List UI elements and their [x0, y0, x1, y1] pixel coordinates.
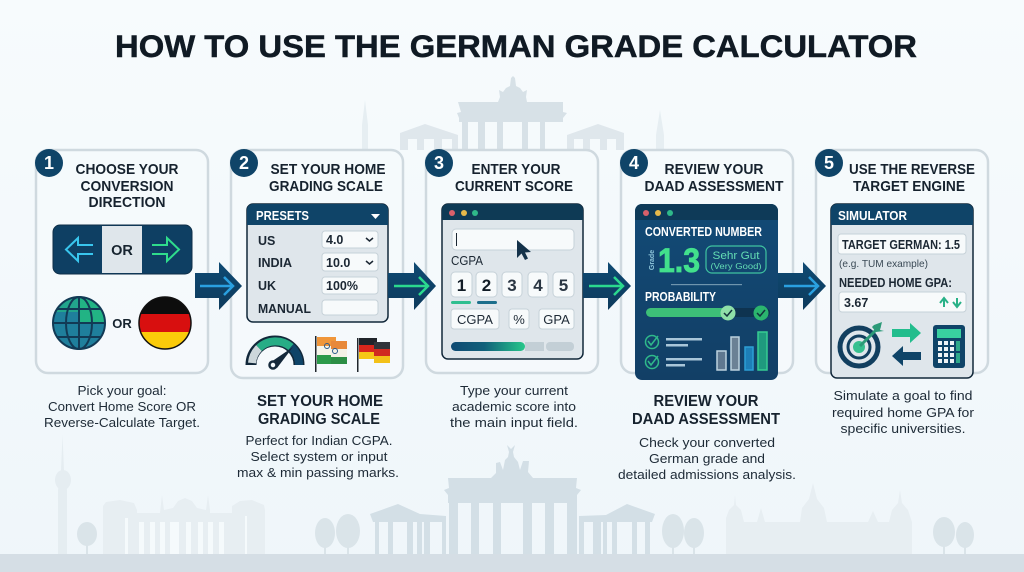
- Berlin TV tower: [55, 435, 71, 554]
- panel: step 1 choose direction: [35, 149, 208, 373]
- title: HOW TO USE THE GERMAN GRADE CALCULATOR: [115, 28, 917, 64]
- assessment dashboard window: [635, 204, 778, 380]
- step 4 lower heading: DAAD ASSESSMENT: [632, 411, 780, 428]
- palace silhouette: [726, 483, 912, 554]
- presets window: 4.0: [326, 233, 343, 247]
- step 5 heading: USE THE REVERSE: [849, 161, 975, 178]
- step 2 heading: SET YOUR HOME: [270, 161, 386, 178]
- score entry window: GPA: [543, 312, 570, 327]
- arrow: step 4 to 5: [778, 262, 826, 310]
- panel: step 3 current score: [425, 149, 598, 373]
- icon: germany flags: [357, 338, 390, 372]
- step 1 badge: 1: [44, 153, 54, 173]
- step 3 heading: ENTER YOUR: [472, 161, 561, 178]
- simulator window: SIMULATOR: [838, 209, 907, 223]
- presets window: PRESETS: [256, 209, 309, 223]
- step 2 badge: 2: [239, 153, 249, 173]
- arrow: step 3 to 4: [583, 262, 631, 310]
- step 4 badge: [620, 149, 648, 177]
- step 2 badge: [230, 149, 258, 177]
- step 1 badge: [35, 149, 63, 177]
- assessment dashboard window: PROBABILITY: [645, 290, 717, 304]
- step 1 description: Pick your goal:: [78, 383, 166, 398]
- step 1 heading: CONVERSION: [80, 178, 174, 195]
- direction toggle: OR: [111, 243, 133, 259]
- presets window: UK: [258, 279, 276, 293]
- step 1 heading: DIRECTION: [88, 194, 166, 211]
- step 5 badge: [815, 149, 843, 177]
- assessment dashboard window: CONVERTED NUMBER: [645, 225, 762, 239]
- trees: [77, 514, 974, 554]
- score entry window: 3: [507, 276, 517, 295]
- step 4 description: detailed admissions analysis.: [618, 467, 796, 482]
- presets window: 100%: [326, 279, 358, 293]
- step 2 description: Select system or input: [250, 449, 388, 464]
- icon: globe: [53, 297, 106, 349]
- presets window: US: [258, 234, 275, 248]
- assessment dashboard window: Sehr Gut: [712, 250, 760, 262]
- step 1 heading: CHOOSE YOUR: [76, 161, 179, 178]
- step 3 description: Type your current: [460, 383, 568, 398]
- arrow: step 1 to 2: [195, 262, 242, 310]
- step 4 lower heading: REVIEW YOUR: [654, 393, 758, 410]
- score entry window: [442, 204, 583, 359]
- icon: german flag circle: [139, 297, 191, 349]
- score entry window: 1: [457, 276, 466, 295]
- panel: step 4 DAAD assessment: [620, 149, 793, 380]
- panel: step 5 reverse target engine: [815, 149, 988, 378]
- step 1 description: Reverse-Calculate Target.: [44, 415, 200, 430]
- presets window: MANUAL: [258, 302, 311, 316]
- step 2 lower heading: SET YOUR HOME: [257, 393, 383, 410]
- step 4 description: German grade and: [649, 451, 765, 466]
- arrow: step 2 to 3: [388, 262, 436, 310]
- step 5 description: required home GPA for: [832, 405, 975, 420]
- step 4 description: Check your converted: [639, 435, 775, 450]
- simulator window: 3.67: [844, 296, 868, 310]
- presets window: [247, 204, 388, 322]
- step 2 lower heading: GRADING SCALE: [258, 411, 380, 428]
- simulator window: TARGET GERMAN: 1.5: [842, 238, 960, 252]
- step 3 heading: CURRENT SCORE: [455, 178, 573, 195]
- step 5 description: specific universities.: [840, 421, 966, 436]
- icon: swap arrows: [892, 323, 921, 366]
- icon: calculator: [933, 325, 965, 368]
- score entry window: 5: [559, 276, 568, 295]
- step 5 description: Simulate a goal to find: [834, 388, 972, 403]
- assessment dashboard window: 1.3: [658, 242, 700, 280]
- score entry window: %: [513, 312, 525, 327]
- simulator window: [831, 204, 973, 378]
- step 2 heading: GRADING SCALE: [269, 178, 383, 195]
- step 2 description: max & min passing marks.: [237, 465, 399, 480]
- score entry window: 4: [533, 276, 543, 295]
- step 5 heading: TARGET ENGINE: [853, 178, 965, 195]
- simulator window: NEEDED HOME GPA:: [839, 276, 952, 290]
- score entry window: CGPA: [457, 312, 493, 327]
- simulator window: (e.g. TUM example): [839, 258, 928, 270]
- assessment dashboard window: (Very Good): [710, 261, 762, 271]
- or label: OR: [112, 316, 132, 331]
- score entry window: 2: [482, 276, 491, 295]
- step 4 heading: DAAD ASSESSMENT: [644, 178, 784, 195]
- step 4 badge: 4: [629, 153, 639, 173]
- step 4 heading: REVIEW YOUR: [664, 161, 764, 178]
- score entry window: CGPA: [451, 254, 484, 268]
- panel: step 2 home grading scale: [230, 149, 403, 378]
- Brandenburg Gate silhouette: [370, 445, 655, 554]
- step 3 badge: 3: [434, 153, 444, 173]
- Reichstag silhouette: [103, 495, 265, 554]
- assessment dashboard window: Grade: [649, 250, 656, 270]
- step 5 badge: 5: [824, 153, 834, 173]
- bottom skyline backdrop: [0, 435, 1024, 572]
- direction toggle: [53, 225, 192, 274]
- top skyline backdrop: [362, 76, 664, 150]
- step 3 badge: [425, 149, 453, 177]
- presets window: INDIA: [258, 256, 292, 270]
- presets window: 10.0: [326, 256, 350, 270]
- icon: gauge: [251, 341, 299, 368]
- step 2 description: Perfect for Indian CGPA.: [246, 433, 392, 448]
- step 1 description: Convert Home Score OR: [48, 399, 196, 414]
- step 3 description: the main input field.: [450, 415, 578, 430]
- step 3 description: academic score into: [452, 399, 576, 414]
- icon: target: [840, 322, 884, 366]
- icon: india flags: [315, 336, 347, 372]
